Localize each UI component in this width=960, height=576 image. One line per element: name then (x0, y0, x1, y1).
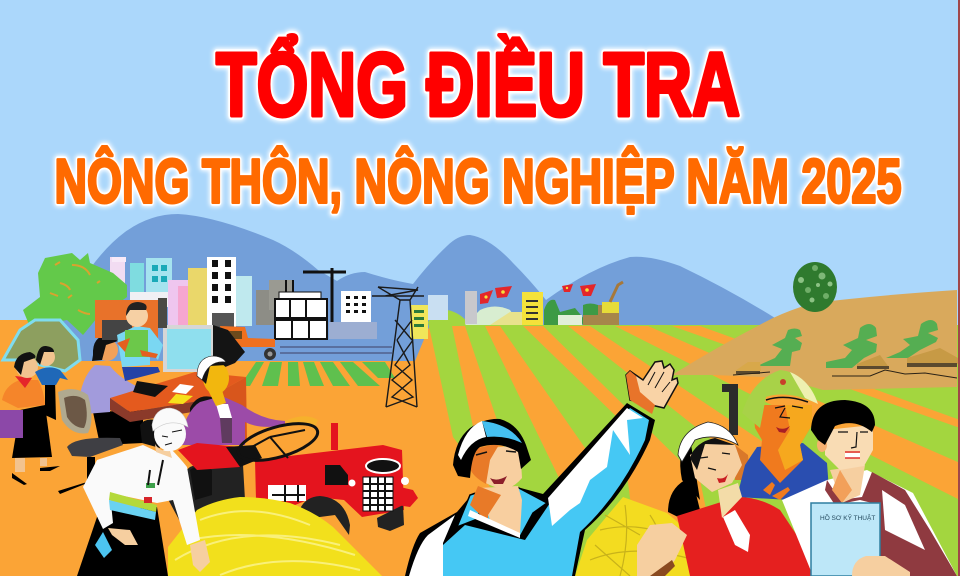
green rice field with stripes (428, 310, 960, 576)
red tractor (163, 416, 418, 535)
title (54, 34, 902, 216)
woman in red with headscarf (637, 422, 817, 576)
small town with flags (465, 282, 623, 325)
office desk and computer (78, 325, 247, 445)
computer monitor (163, 325, 245, 372)
icon: tree (793, 262, 837, 312)
terraced green shapes (757, 320, 938, 368)
man in maroon shirt (782, 400, 957, 576)
right wheat mound (575, 497, 747, 576)
title line: TỔNG ĐIỀU TRA: TỔNG ĐIỀU TRA (216, 34, 740, 136)
office chair (58, 389, 123, 494)
head and helmet (453, 419, 531, 489)
right edge strip (958, 0, 960, 576)
seated woman at desk (78, 335, 160, 445)
orange ground (0, 320, 560, 576)
woman in white blouse (77, 408, 210, 576)
man holding green folder (95, 298, 167, 381)
folder with label: HỒ SƠ KỸ THUẬT (820, 512, 875, 522)
title line: TỔNG ĐIỀU TRA: TỔNG ĐIỀU TRA (216, 34, 740, 136)
girl with purple bag (0, 352, 60, 485)
folder with label (811, 503, 880, 576)
houses (735, 348, 958, 374)
soldier with green helmet (722, 370, 829, 500)
worker in blue waving (405, 361, 678, 576)
raised arm and torso (405, 403, 655, 576)
waving hand (626, 361, 678, 414)
keyboard and papers (133, 381, 194, 404)
title line: TỔNG ĐIỀU TRA: TỔNG ĐIỀU TRA (216, 34, 740, 136)
dome structure (3, 320, 80, 371)
tractor driver in purple (178, 356, 318, 445)
truck behind the office (220, 326, 276, 360)
city skyline (110, 257, 477, 353)
icon: power pylon (372, 287, 424, 407)
left tree (23, 253, 127, 335)
girl in blue shirt (35, 346, 68, 420)
green crop strip behind tower (240, 362, 395, 386)
left wheat mound (168, 497, 382, 576)
blue mountains (60, 214, 775, 362)
hill with houses and terraces (672, 262, 958, 390)
